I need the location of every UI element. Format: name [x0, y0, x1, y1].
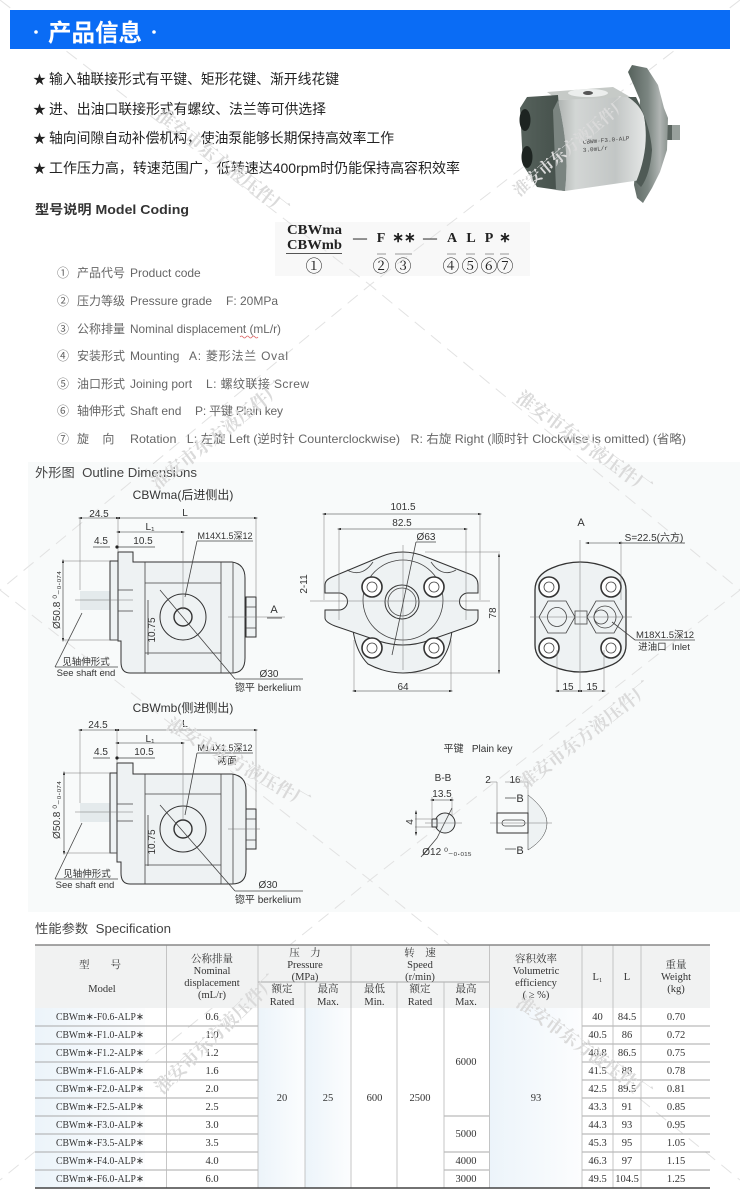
specification table: 93 [622, 1120, 632, 1131]
model coding diagram: ⑤ [462, 257, 478, 276]
specification table: 1.15 [667, 1156, 685, 1167]
specification table: 89.5 [618, 1084, 636, 1095]
specification table: 4000 [456, 1156, 476, 1167]
specification table [35, 945, 710, 1188]
code legend: ② [57, 294, 69, 308]
drawing: CBWmb side view: 4.5 [94, 747, 108, 758]
feature list: ★ [33, 102, 46, 117]
drawing: plain key: 16 [509, 775, 521, 786]
specification table: 45.3 [588, 1138, 607, 1149]
specification table: ( ≥ %) [523, 990, 550, 1001]
model coding diagram: ③ [394, 257, 412, 276]
code legend: ⑦ [57, 432, 69, 446]
code legend: ③ [57, 322, 69, 336]
specification table: 型 号 [79, 958, 121, 971]
specification table: 40.8 [588, 1048, 607, 1059]
specification table: 42.5 [588, 1084, 607, 1095]
drawing: plain key [405, 742, 552, 858]
drawing: view A: 进油口 Inlet [638, 641, 690, 653]
specification table: (r/min) [405, 972, 435, 983]
specification table: Rated [270, 997, 295, 1008]
specification table: 86 [622, 1030, 632, 1041]
drawing: CBWma side view: Ø30 [260, 669, 279, 680]
specification table: Rated [408, 997, 433, 1008]
drawing: plain key: 平键 Plain key [444, 742, 512, 755]
code legend: A: 菱形法兰 Oval [189, 349, 288, 363]
drawing: plain key: 13.5 [432, 789, 452, 800]
specification table: 最高 [318, 982, 338, 995]
pump photo [520, 65, 680, 203]
specification table: Volumetric [513, 966, 560, 977]
code legend: ⑥ [57, 404, 69, 418]
specification table: Speed [407, 960, 434, 971]
drawing: plain key: B [516, 845, 524, 857]
drawing: CBWma side view: 4.5 [94, 536, 108, 547]
drawing: CBWmb side view: 锪平 berkelium [235, 893, 301, 906]
drawing: CBWma side view: M14X1.5深12 [197, 531, 253, 541]
feature list: 工作压力高，转速范围广，低转速达400rpm时仍能保持高容积效率 [49, 160, 460, 176]
code legend: Product code [130, 266, 201, 280]
specification table: Min. [364, 997, 385, 1008]
specification table: 6000 [456, 1057, 476, 1068]
model coding diagram: ∗ [499, 231, 511, 246]
specification heading: 性能参数 Specification [35, 921, 171, 936]
specification table: 最低 [364, 983, 385, 995]
specification table: 88 [622, 1066, 632, 1077]
code legend: F: 20MPa [226, 294, 278, 308]
specification table: 5000 [456, 1129, 476, 1140]
specification table: 1.0 [205, 1030, 219, 1041]
specification table: 93 [531, 1093, 541, 1104]
code legend: Shaft end [130, 404, 181, 418]
watermarks: 淮安市东方液压件厂 [151, 971, 281, 1098]
drawing: CBWma side view: See shaft end [57, 668, 115, 679]
drawing: CBWmb side view [52, 701, 303, 906]
specification table: Model [88, 984, 116, 995]
specification table: 20 [277, 1093, 287, 1104]
specification table: 97 [622, 1156, 632, 1167]
watermarks: 淮安市东方液压件厂 [163, 714, 313, 812]
drawing: CBWmb side view: L₁ [146, 734, 155, 745]
specification table: 0.72 [667, 1030, 685, 1041]
specification table: CBWm∗-F3.5-ALP∗ [56, 1138, 144, 1149]
drawing: front view: 78 [488, 607, 499, 619]
specification table: 1.25 [667, 1174, 685, 1185]
model coding diagram: A [447, 231, 458, 246]
drawing: plain key: 2 [485, 775, 491, 786]
feature list: 输入轴联接形式有平键、矩形花键、渐开线花键 [49, 71, 339, 87]
specification table: 3.5 [205, 1138, 219, 1149]
drawing: plain key: 4 [405, 819, 416, 825]
specification table: 0.95 [667, 1120, 685, 1131]
specification table: 0.81 [667, 1084, 685, 1095]
drawing: view A: M18X1.5深12 [636, 630, 694, 641]
model coding diagram: ⑦ [496, 257, 514, 276]
coding background [275, 222, 530, 276]
code legend: 公称排量 [77, 322, 125, 336]
code legend: 产品代号 [77, 266, 125, 280]
specification table: 0.78 [667, 1066, 685, 1077]
specification table: 重量 [666, 958, 686, 971]
specification table: 43.3 [588, 1102, 607, 1113]
specification table: CBWm∗-F1.0-ALP∗ [56, 1030, 144, 1041]
code legend: Rotation L: 左旋 Left (逆时针 Counterclockwise) R: 右旋 Right (顺时针 Clockwise is omitted) (省略) [130, 431, 686, 446]
specification table: 1.2 [205, 1048, 219, 1059]
drawing: front view: Ø63 [417, 532, 436, 543]
drawing: CBWmb side view: 10.5 [134, 747, 154, 758]
specification table: 2.0 [205, 1084, 219, 1095]
specification table: CBWm∗-F3.0-ALP∗ [56, 1120, 144, 1131]
specification table: 转 速 [404, 946, 436, 959]
header banner [10, 10, 730, 49]
drawing: plain key: B [516, 793, 524, 805]
drawing: plain key: Ø12 ⁰₋₀.₀₁₅ [422, 847, 472, 858]
drawing: front view: 64 [397, 682, 409, 693]
specification table: 40.5 [588, 1030, 607, 1041]
drawing: CBWma side view: 24.5 [89, 509, 109, 520]
specification table: CBWm∗-F4.0-ALP∗ [56, 1156, 144, 1167]
specification table: 容积效率 [515, 952, 557, 965]
drawing: CBWma side view: L [182, 508, 188, 519]
drawing: CBWma side view: 锪平 berkelium [235, 681, 301, 694]
outline section background [28, 462, 740, 912]
drawing: CBWmb side view: M14X1.5深12 [197, 743, 253, 753]
drawing: CBWma side view: CBWma(后进侧出) [133, 488, 233, 502]
feature list: ★ [33, 131, 46, 146]
specification table: (MPa) [292, 972, 319, 983]
code legend: 安装形式 [77, 348, 125, 363]
code legend: 油口形式 [77, 377, 125, 391]
code legend: L: 螺纹联接 Screw [206, 376, 309, 391]
pump photo: 3.0mL/r [583, 145, 609, 154]
specification table: efficiency [515, 978, 558, 989]
drawing: CBWmb side view: 见轴伸形式 [63, 868, 111, 880]
model coding diagram: ① [306, 257, 322, 276]
specification table: (mL/r) [198, 990, 226, 1001]
model coding diagram: — [422, 231, 438, 246]
specification table: 1.05 [667, 1138, 685, 1149]
feature list: ★ [33, 72, 46, 87]
drawing: view A: 15 [586, 682, 598, 693]
specification table: CBWm∗-F2.0-ALP∗ [56, 1084, 144, 1095]
drawing: CBWmb side view: Ø30 [259, 880, 278, 891]
specification table: CBWm∗-F1.6-ALP∗ [56, 1066, 144, 1077]
specification table: Pressure [287, 960, 323, 971]
specification table: 3.0 [205, 1120, 219, 1131]
specification table: Weight [661, 972, 691, 983]
code legend: 轴伸形式 [77, 403, 125, 418]
code legend: Pressure grade [130, 294, 212, 308]
model coding diagram: CBWmb [287, 238, 342, 253]
specification table: 压 力 [289, 946, 321, 959]
specification table: 40 [592, 1012, 603, 1023]
watermarks: 淮安市东方液压件厂 [147, 378, 287, 493]
code legend: ⑤ [57, 377, 69, 391]
drawing: CBWmb side view: 10.75 [147, 829, 158, 855]
specification table: 49.5 [588, 1174, 607, 1185]
specification table: 41.5 [588, 1066, 607, 1077]
specification table: 0.75 [667, 1048, 685, 1059]
specification table: 2500 [410, 1093, 430, 1104]
specification table: 104.5 [615, 1174, 639, 1185]
drawing: plain key: B-B [435, 773, 452, 784]
code legend: 压力等级 [77, 294, 125, 308]
drawing: front view: 101.5 [390, 502, 416, 513]
specification table: 3000 [456, 1174, 476, 1185]
feature list: 轴向间隙自动补偿机构，使油泵能够长期保持高效率工作 [49, 130, 394, 146]
code legend: Nominal displacement (mL/r) [130, 322, 281, 336]
drawing: CBWmb side view: L [182, 719, 188, 730]
watermarks: 淮安市东方液压件厂 [513, 992, 655, 1103]
specification table: (kg) [667, 984, 685, 995]
code legend: P: 平键 Plain key [195, 404, 283, 418]
watermarks [147, 93, 655, 1103]
code legend: 旋 向 [77, 431, 114, 446]
specification table: 46.3 [588, 1156, 607, 1167]
drawing: front view [299, 502, 500, 693]
specification table: CBWm∗-F2.5-ALP∗ [56, 1102, 144, 1113]
drawing: view A: A [577, 517, 585, 529]
feature list: 进、出油口联接形式有螺纹、法兰等可供选择 [49, 101, 326, 117]
drawing: front view: 2-11 [299, 574, 310, 594]
drawing: view A: S=22.5(六方) [625, 531, 683, 544]
model coding diagram [286, 223, 514, 276]
outline heading: 外形图 Outline Dimensions [35, 466, 197, 480]
specification table: CBWm∗-F1.2-ALP∗ [56, 1048, 144, 1059]
model coding diagram: ⑥ [480, 257, 498, 276]
specification table: 1.6 [205, 1066, 219, 1077]
specification table: 公称排量 [191, 952, 233, 965]
drawing: CBWma side view: Ø50.8 ⁰₋₀.₀₇₄ [52, 571, 63, 629]
specification table: Nominal [194, 966, 230, 977]
specification table: CBWm∗-F6.0-ALP∗ [56, 1174, 144, 1185]
code legend: Joining port [130, 377, 193, 391]
drawing: CBWmb side view: CBWmb(侧进侧出) [133, 701, 233, 715]
specification table: displacement [184, 978, 240, 989]
model coding diagram: ④ [442, 257, 460, 276]
specification table: 0.85 [667, 1102, 685, 1113]
drawing: CBWmb side view: 两面 [217, 756, 237, 767]
watermarks: 淮安市东方液压件厂 [515, 678, 655, 793]
watermarks: 淮安市东方液压件厂 [513, 387, 655, 498]
drawing: CBWma side view: 10.5 [133, 536, 153, 547]
drawing: view A [530, 517, 695, 693]
specification table: 最高 [456, 982, 476, 995]
code legend: ④ [57, 349, 69, 363]
banner dots [34, 30, 156, 34]
watermarks: 淮安市东方液压件厂 [509, 93, 632, 200]
specification table: 额定 [272, 982, 293, 995]
specification table: 2.5 [205, 1102, 219, 1113]
drawing: CBWma side view: A [270, 604, 278, 616]
specification table: 600 [367, 1093, 382, 1104]
code legend [57, 266, 686, 446]
feature list [33, 71, 460, 176]
model coding diagram: F [377, 231, 385, 246]
drawing: CBWmb side view: See shaft end [56, 880, 114, 891]
model coding diagram: — [352, 231, 368, 246]
model coding diagram: L [466, 231, 476, 246]
feature list: ★ [33, 161, 46, 176]
model coding diagram: P [485, 231, 494, 246]
specification table: Max. [317, 997, 339, 1008]
drawing: CBWmb side view: Ø50.8 ⁰₋₀.₀₇₄ [52, 781, 63, 839]
model coding diagram: ② [372, 257, 390, 276]
pump photo: CBWm-F3.0-ALP [583, 135, 630, 146]
specification table: CBWm∗-F0.6-ALP∗ [56, 1012, 144, 1023]
specification table: L [624, 972, 630, 983]
drawing: view A: 15 [562, 682, 574, 693]
specification table: 44.3 [588, 1120, 607, 1131]
watermarks: 淮安市东方液压件厂 [153, 104, 293, 220]
specification table: 84.5 [618, 1012, 636, 1023]
code legend: ① [57, 266, 69, 280]
specification table: 91 [622, 1102, 632, 1113]
drawing: CBWma side view: L₁ [146, 522, 155, 533]
model coding diagram: ∗∗ [392, 231, 416, 246]
specification table: 86.5 [618, 1048, 636, 1059]
code legend: Mounting [130, 349, 179, 363]
specification table: 0.70 [667, 1012, 685, 1023]
specification table: 25 [323, 1093, 333, 1104]
drawing: front view: 82.5 [392, 518, 412, 529]
model coding diagram: CBWma [287, 223, 342, 238]
specification table: 0.6 [205, 1012, 219, 1023]
drawing: CBWma side view: 见轴伸形式 [62, 656, 110, 668]
banner title: 产品信息 [48, 20, 142, 47]
drawing: CBWma side view [52, 488, 303, 694]
specification table: 4.0 [205, 1156, 219, 1167]
model coding heading: 型号说明 Model Coding [35, 202, 189, 217]
specification table: Max. [455, 997, 477, 1008]
specification table: 95 [622, 1138, 632, 1149]
specification table: 额定 [410, 982, 431, 995]
specification table: L₁ [592, 972, 603, 983]
drawing: CBWma side view: 10.75 [147, 617, 158, 643]
specification table: 6.0 [205, 1174, 219, 1185]
drawing: CBWmb side view: 24.5 [88, 720, 108, 731]
